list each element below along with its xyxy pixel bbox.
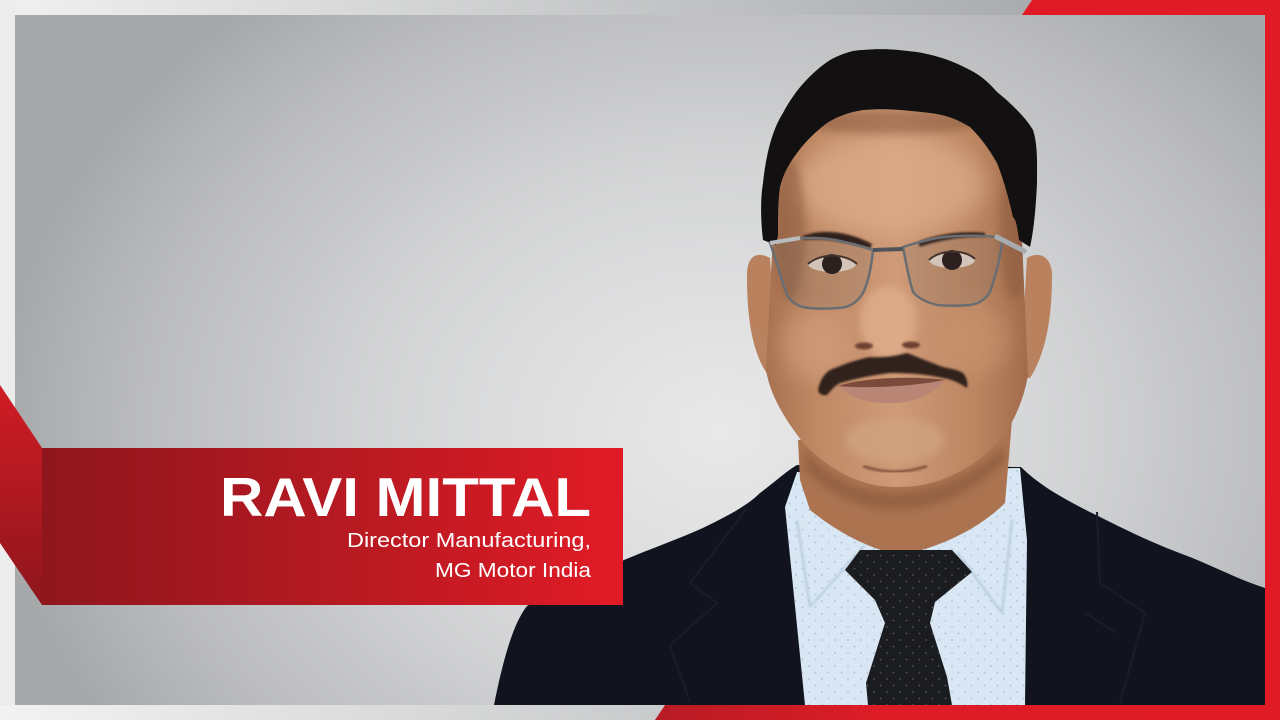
- eyes: [808, 250, 975, 274]
- face: [766, 100, 1028, 487]
- nostrils: [855, 342, 920, 350]
- jacket: [494, 465, 1265, 705]
- neck: [798, 420, 1012, 555]
- shirt: [785, 468, 1027, 705]
- hair: [761, 49, 1037, 247]
- lapel seams: [670, 508, 1145, 703]
- chin crease: [863, 466, 927, 472]
- banner band: [42, 448, 623, 605]
- neck shadow under chin: [805, 445, 1005, 510]
- face shading: [775, 110, 1030, 462]
- glasses: [770, 236, 1026, 309]
- bridge and temples: [873, 249, 903, 250]
- collar shadows: [797, 520, 1012, 613]
- tie: [845, 550, 972, 705]
- name: RAVI MITTAL: [220, 466, 591, 528]
- lips: [838, 378, 945, 403]
- portrait: [494, 49, 1265, 705]
- eyebrows: [803, 232, 985, 249]
- banner fold: [0, 385, 42, 605]
- company: MG Motor India: [435, 560, 592, 582]
- name banner: [0, 385, 623, 605]
- role: Director Manufacturing,: [347, 530, 591, 552]
- moustache: [818, 353, 967, 395]
- ears: [747, 255, 1052, 378]
